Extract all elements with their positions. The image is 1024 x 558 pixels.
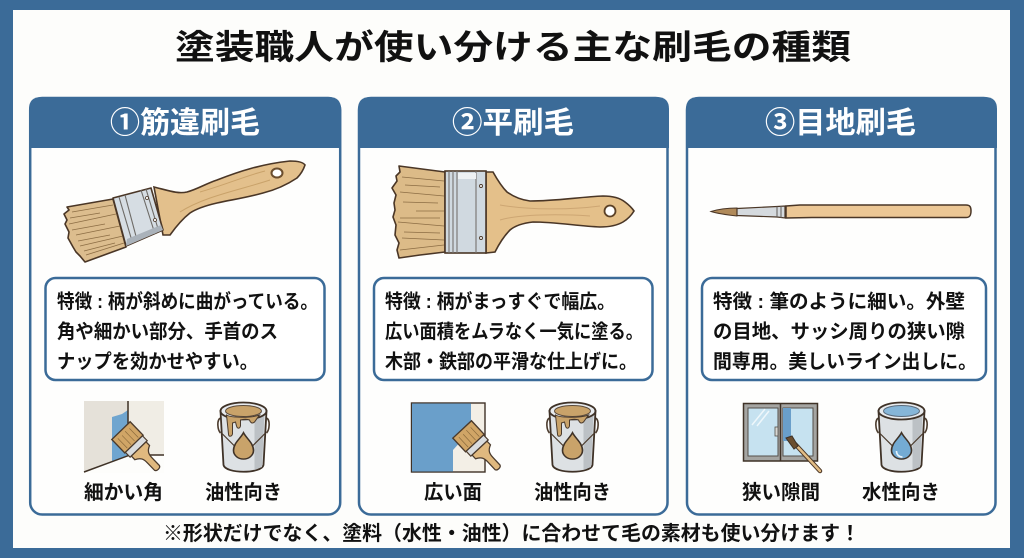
label: 狭い隙間: 狭い隙間 bbox=[742, 481, 820, 504]
feature box: 筋違刷毛: 角や細かい部分、手首のス bbox=[57, 320, 278, 343]
feature box: 筋違刷毛: 特徴 : 柄が斜めに曲がっている。 bbox=[57, 290, 318, 313]
feature box: 平刷毛: 木部・鉄部の平滑な仕上げに。 bbox=[385, 351, 637, 373]
brush illustration: angled brush bbox=[64, 161, 305, 262]
panel: 筋違刷毛 bbox=[29, 97, 341, 514]
icon: oil paint can bbox=[547, 402, 598, 472]
feature box: 目地刷毛: 特徴 : 筆のように細い。外壁 bbox=[713, 291, 965, 313]
icon: oil paint can bbox=[218, 402, 269, 472]
label: 油性向き: 油性向き bbox=[205, 481, 282, 504]
feature box: 平刷毛: 広い面積をムラなく一気に塗る。 bbox=[385, 321, 643, 343]
panel header: 目地刷毛: ③目地刷毛 bbox=[765, 107, 916, 140]
feature box: 筋違刷毛 bbox=[46, 278, 324, 380]
panel: 平刷毛 bbox=[358, 97, 669, 514]
brush illustration: flat brush bbox=[392, 166, 634, 258]
icon: window with narrow brush bbox=[744, 403, 820, 471]
feature box: 目地刷毛: の目地、サッシ周りの狭い隙 bbox=[713, 321, 965, 343]
label: 油性向き: 油性向き bbox=[534, 481, 611, 504]
label: 水性向き: 水性向き bbox=[862, 481, 940, 504]
panel: 目地刷毛 bbox=[686, 97, 997, 514]
brush illustration: thin liner brush bbox=[711, 205, 971, 218]
feature box: 平刷毛 bbox=[374, 278, 652, 380]
panel header: 筋違刷毛: ①筋違刷毛 bbox=[110, 107, 260, 140]
feature box: 平刷毛: 特徴 : 柄がまっすぐで幅広。 bbox=[385, 290, 615, 313]
panel header: 筋違刷毛 bbox=[29, 97, 341, 148]
icon: brush painting wide surface bbox=[412, 403, 508, 477]
feature box: 目地刷毛: 間専用。美しいライン出しに。 bbox=[713, 351, 977, 373]
footnote: ※形状だけでなく、塗料（水性・油性）に合わせて毛の素材も使い分けます！ bbox=[163, 522, 860, 545]
icon: water paint can bbox=[876, 402, 927, 472]
title: 塗装職人が使い分ける主な刷毛の種類 bbox=[175, 28, 851, 67]
icon: brush painting a corner bbox=[84, 401, 167, 478]
panel header: 平刷毛: ②平刷毛 bbox=[452, 107, 574, 140]
feature box: 筋違刷毛: ナップを効かせやすい。 bbox=[57, 351, 258, 373]
panel header: 目地刷毛 bbox=[686, 97, 997, 148]
feature box: 目地刷毛 bbox=[702, 278, 986, 380]
label: 細かい角: 細かい角 bbox=[84, 480, 163, 504]
label: 広い面: 広い面 bbox=[424, 481, 482, 504]
panel header: 平刷毛 bbox=[358, 97, 669, 148]
